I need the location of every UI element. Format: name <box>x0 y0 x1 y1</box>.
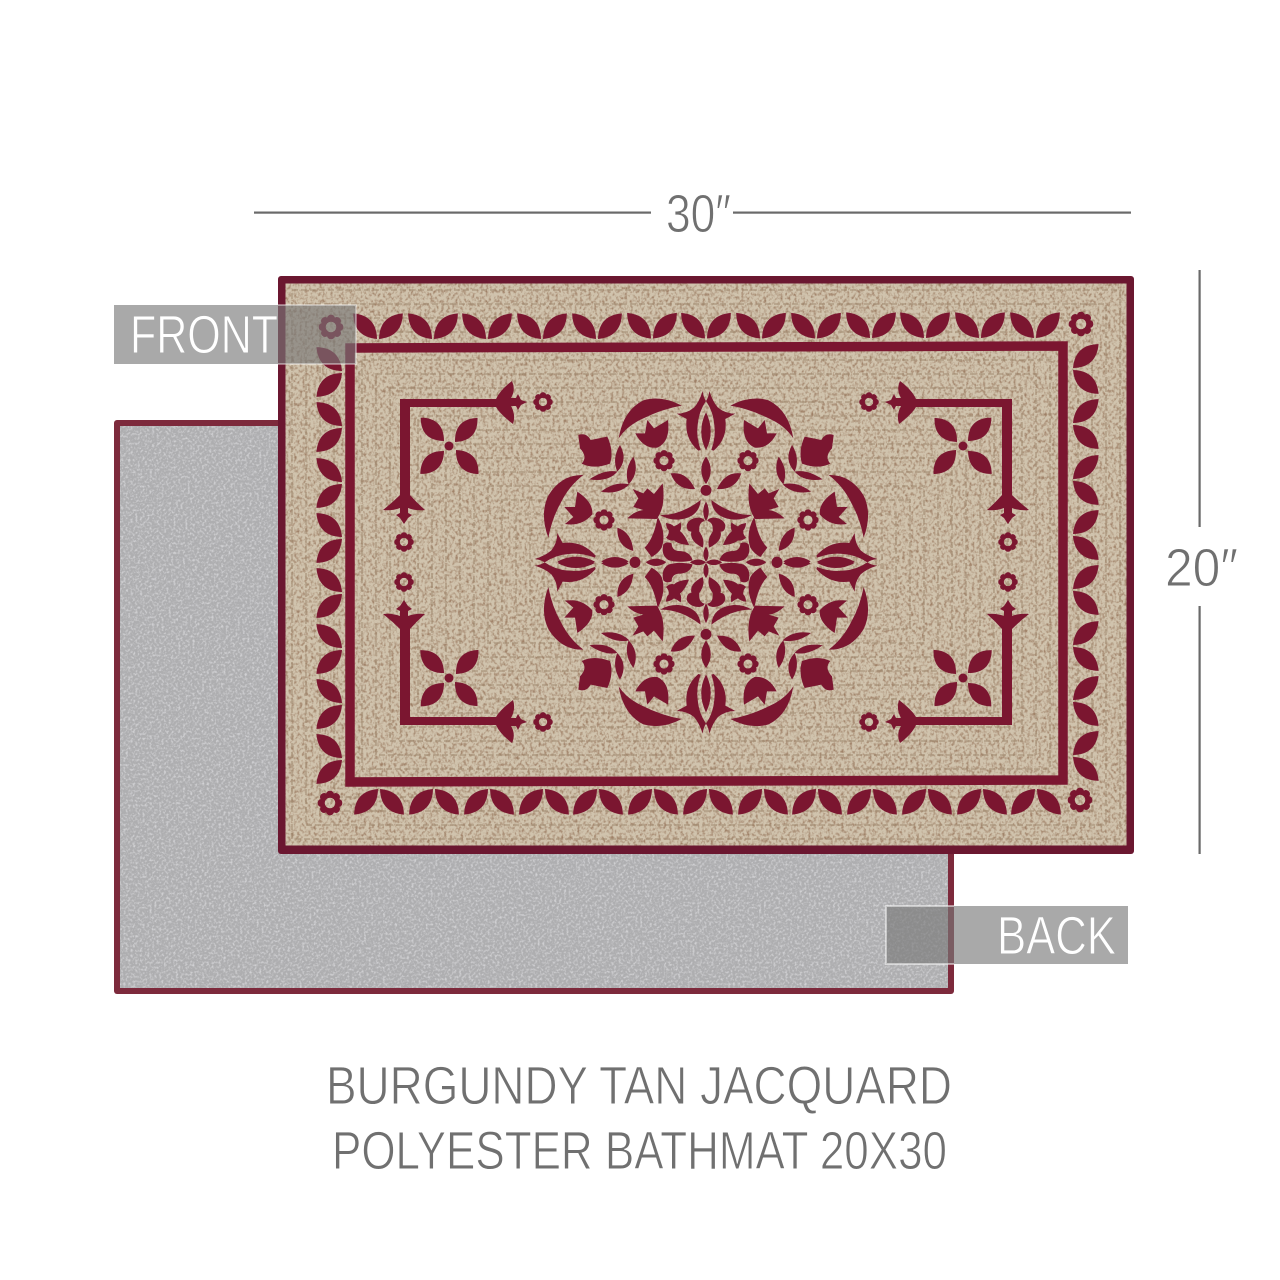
back label: BACK <box>997 906 1116 966</box>
back label <box>886 906 1128 966</box>
left leaf border <box>311 341 347 790</box>
bottom leaf border <box>348 784 1067 820</box>
burgundy frame line <box>350 346 1063 782</box>
right leaf border <box>1068 338 1104 787</box>
height dimension 20 inches: 20″ <box>1165 538 1238 598</box>
width dimension 30 inches: 30″ <box>666 184 731 244</box>
product title: POLYESTER BATHMAT 20X30 <box>332 1121 947 1181</box>
product title <box>326 1056 952 1181</box>
central medallion <box>535 391 877 734</box>
back side of mat <box>114 420 954 994</box>
front label: FRONT <box>130 305 278 365</box>
tan braided field <box>286 284 1126 846</box>
product title: BURGUNDY TAN JACQUARD <box>326 1056 952 1116</box>
top leaf border <box>347 307 1066 344</box>
front side of mat <box>278 276 1134 854</box>
corner brackets <box>383 381 1029 743</box>
corner flowers <box>318 312 1093 815</box>
